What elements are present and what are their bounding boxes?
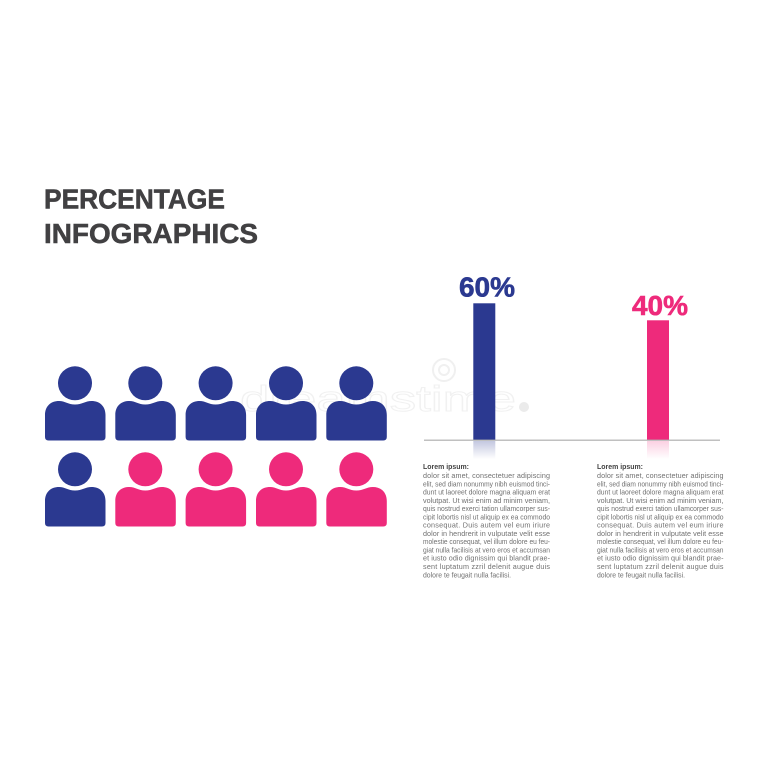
person 10: [326, 452, 387, 526]
text block: right: dunt ut laoreet dolore magna aliquam erat: [597, 488, 724, 496]
text block: left: cipit lobortis nisl ut aliquip ex ea commodo: [423, 512, 550, 521]
text block: left: Lorem ipsum:: [423, 462, 469, 471]
person 9: [256, 452, 316, 526]
bar: 60%: [459, 272, 515, 459]
bar: 40%: 40%: [632, 290, 688, 321]
text block: right: cipit lobortis nisl ut aliquip ex ea commodo: [597, 512, 724, 521]
text block: left: dolor sit amet, consectetuer adipiscing: [423, 471, 550, 480]
person 3: [186, 366, 246, 440]
title: PERCENTAGE: [44, 184, 225, 214]
axis line: [424, 440, 720, 441]
text block: right: volutpat. Ut wisi enim ad minim veniam,: [597, 496, 724, 505]
text block: right: dolor in hendrerit in vulputate velit esse: [597, 529, 724, 538]
text block: right: elit, sed diam nonummy nibh euismod tinci-: [597, 479, 724, 488]
text block: right: dolor sit amet, consectetuer adipiscing: [597, 471, 724, 480]
text block: right: et iusto odio dignissim qui blandit prae-: [597, 554, 724, 563]
text block: right: dolore te feugait nulla facilisi.: [597, 570, 685, 579]
text block: left: dolore te feugait nulla facilisi.: [423, 570, 511, 579]
person 4: [256, 366, 316, 440]
text block: right: giat nulla facilisis at vero eros et accumsan: [597, 546, 724, 554]
person 7: [115, 452, 176, 526]
text block: left: quis nostrud exerci tation ullamcorper sus-: [423, 504, 551, 513]
text block: right: consequat. Duis autem vel eum iriure: [597, 521, 724, 530]
watermark: dreamstime: [240, 378, 516, 419]
person 1: [45, 366, 106, 440]
watermark: [240, 359, 529, 419]
bar: 60%: 60%: [459, 272, 515, 303]
person 2: [115, 366, 176, 440]
title: INFOGRAPHICS: [44, 218, 258, 249]
person 6: [45, 452, 106, 526]
text block: left: volutpat. Ut wisi enim ad minim veniam,: [423, 496, 550, 505]
text block: left: giat nulla facilisis at vero eros et accumsan: [423, 546, 550, 554]
text block: right: sent luptatum zzril delenit augue duis: [597, 562, 724, 571]
text block: left: consequat. Duis autem vel eum iriure: [423, 521, 550, 530]
text block: right: [597, 462, 724, 579]
text block: left: sent luptatum zzril delenit augue duis: [423, 562, 550, 571]
bar: 40%: [632, 290, 688, 459]
text block: left: elit, sed diam nonummy nibh euismod tinci-: [423, 479, 551, 488]
text block: right: quis nostrud exerci tation ullamcorper sus-: [597, 504, 724, 513]
text block: left: dunt ut laoreet dolore magna aliquam erat: [423, 488, 550, 496]
person 5: [326, 366, 387, 440]
pictogram: ten people, six blue and four pink: [45, 366, 387, 526]
text block: left: molestie consequat, vel illum dolore eu feu-: [423, 537, 551, 546]
text block: left: [423, 462, 551, 579]
text block: left: dolor in hendrerit in vulputate velit esse: [423, 529, 550, 538]
bar chart: [424, 272, 720, 459]
title: [44, 184, 258, 249]
text block: left: et iusto odio dignissim qui blandit prae-: [423, 554, 551, 563]
person 8: [186, 452, 246, 526]
text block: right: molestie consequat, vel illum dolore eu feu-: [597, 537, 724, 546]
text block: right: Lorem ipsum:: [597, 462, 643, 471]
